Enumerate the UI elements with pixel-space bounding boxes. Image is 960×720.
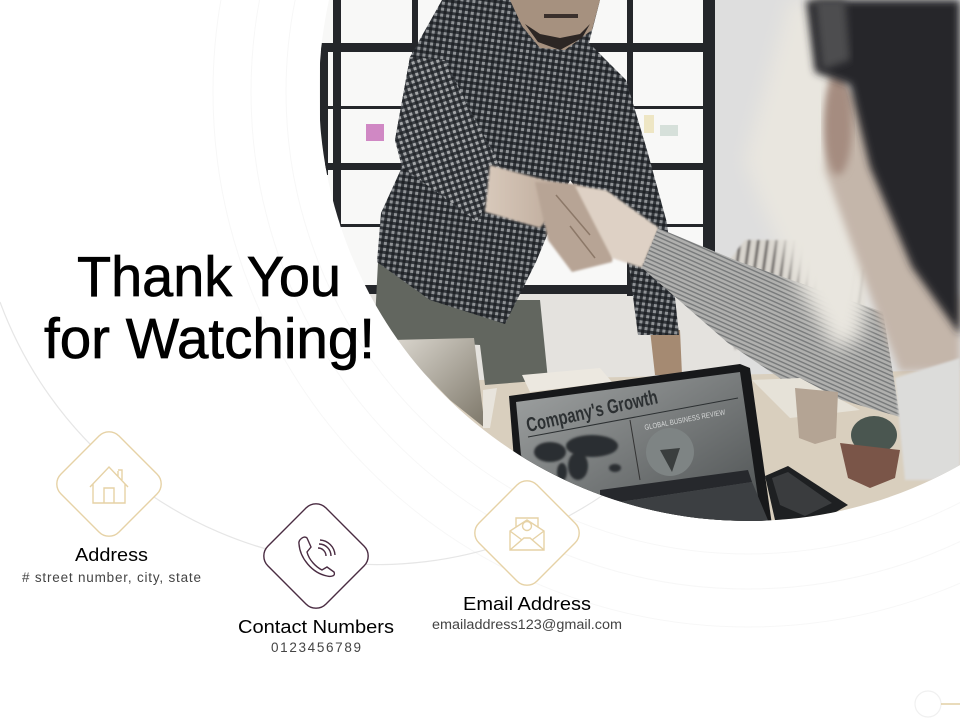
photo background [300, 0, 960, 530]
address detail: # street number, city, state [22, 570, 201, 585]
man's shirt [377, 0, 679, 335]
woman's neck and face [825, 70, 960, 372]
title: for Watching! [44, 307, 375, 371]
man's beard [525, 24, 590, 50]
screen title: Company's Growth [524, 386, 660, 437]
phone [765, 466, 848, 520]
table [431, 370, 960, 521]
table strip [600, 470, 752, 505]
icon: phone diamond with handset [258, 498, 374, 614]
address heading: Address [75, 545, 148, 565]
contact item: address [22, 426, 201, 585]
contact item: email [432, 475, 622, 632]
contact detail: 0123456789 [271, 640, 361, 655]
man's arm on far side [650, 330, 682, 375]
woman's ear [824, 75, 852, 175]
contact item: phone [238, 498, 394, 655]
icon: address diamond with house [51, 426, 167, 542]
laptop with report: GLOBAL BUSINESS REVIEW [644, 407, 727, 432]
background rings [213, 0, 960, 627]
other laptop [398, 338, 483, 426]
contact heading: Contact Numbers [238, 617, 394, 637]
woman's dark hair [806, 0, 960, 335]
man's forearm [485, 165, 575, 228]
woman's hand [575, 186, 659, 268]
plant [840, 416, 900, 488]
title [44, 245, 375, 371]
man's face [510, 0, 600, 50]
blonde hair [745, 0, 880, 350]
right wall [714, 0, 960, 400]
window frame [320, 0, 715, 296]
back person striped shirt [728, 240, 865, 350]
woman's sleeve [642, 228, 900, 417]
photo: handshake meeting [300, 0, 960, 530]
papers [522, 372, 612, 392]
title: Thank You [77, 245, 341, 309]
man's trousers [374, 262, 548, 385]
email detail: emailaddress123@gmail.com [432, 617, 622, 632]
clasped hands [535, 182, 618, 272]
man's sleeve [395, 57, 500, 222]
coffee cup [795, 388, 838, 444]
email heading: Email Address [463, 594, 591, 614]
page marker [915, 691, 960, 717]
lower wall [370, 294, 714, 381]
world map [534, 435, 621, 481]
woman's sweater [895, 358, 960, 480]
sticky notes [366, 124, 384, 141]
icon: email diamond with envelope [469, 475, 585, 591]
pie chart [646, 428, 694, 476]
laptop with report [509, 364, 772, 525]
connector arc [0, 302, 700, 565]
